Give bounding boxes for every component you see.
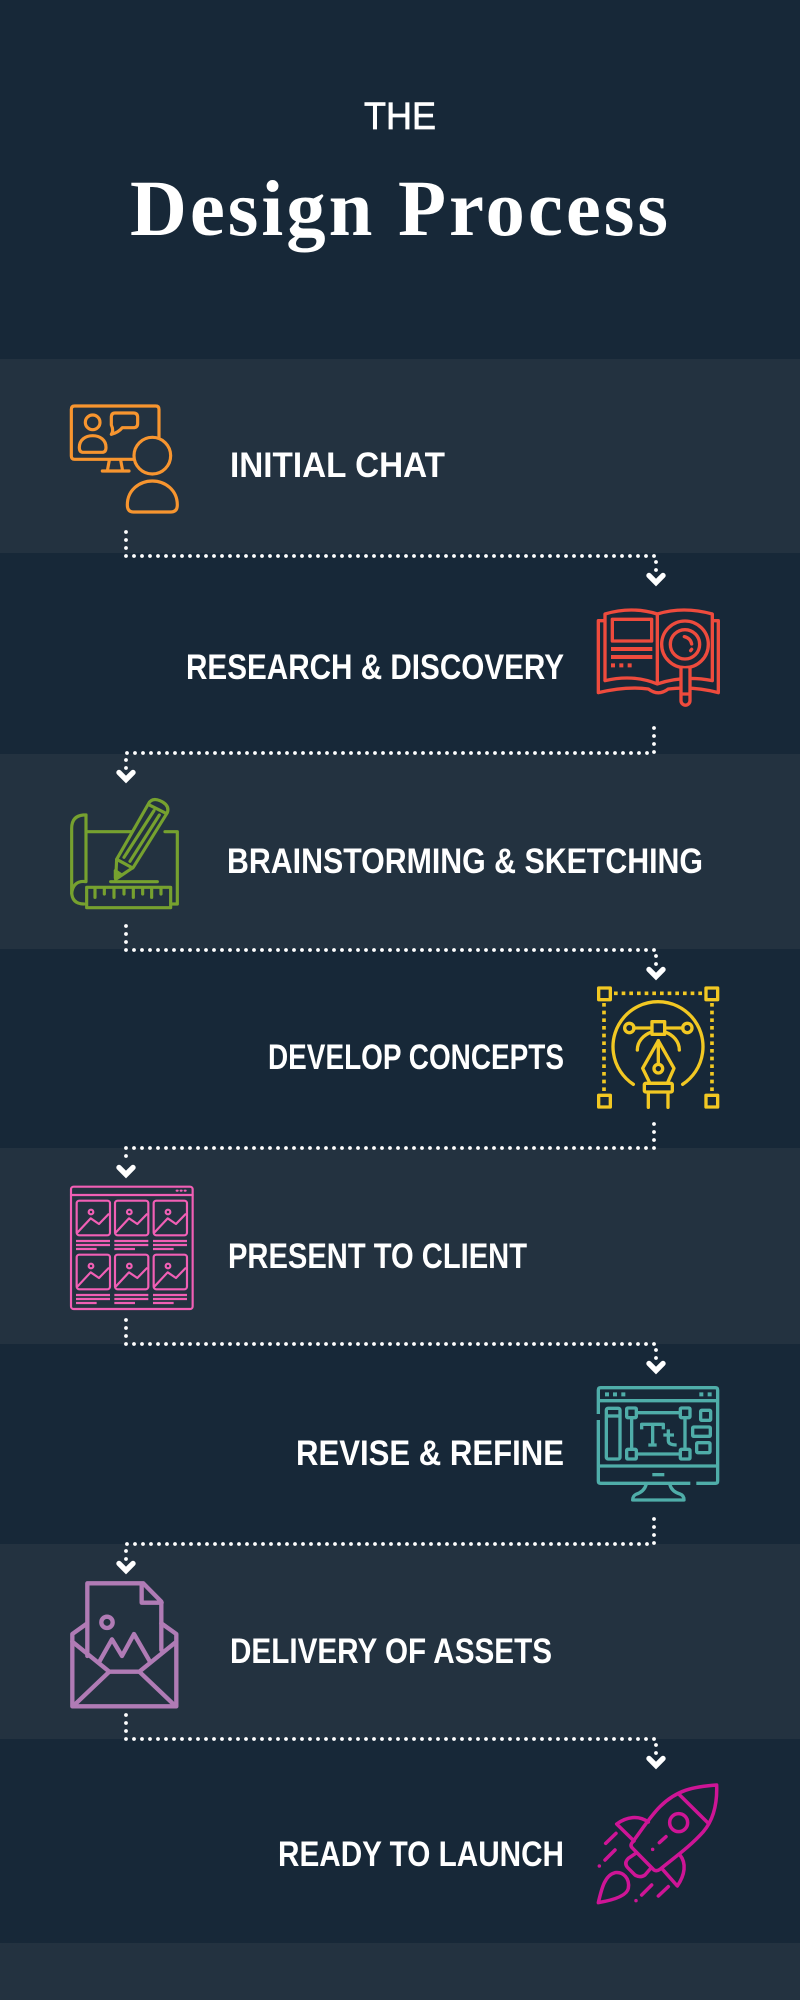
label: brainstorming and sketching: BRAINSTORMING & SKETCHING [227, 842, 703, 881]
connector: step 5 to step 6 [126, 1320, 663, 1370]
connector: step 3 to step 4 [126, 926, 663, 976]
connector: step 1 to step 2 [126, 532, 663, 582]
footer band [0, 1943, 800, 2000]
panel: step 7 delivery of assets [0, 1544, 800, 1739]
icon: type editor monitor [598, 1388, 718, 1500]
panel: step 3 brainstorming and sketching [0, 754, 800, 949]
connector: step 6 to step 7 [119, 1519, 654, 1570]
connector: step 2 to step 3 [119, 728, 654, 780]
icon: gallery window [71, 1187, 193, 1309]
label: develop concepts: DEVELOP CONCEPTS [268, 1038, 564, 1077]
icon: blueprint, pencil and ruler [72, 800, 177, 908]
icon: pen tool [599, 988, 718, 1107]
label: delivery of assets: DELIVERY OF ASSETS [230, 1632, 552, 1671]
label: present to client: PRESENT TO CLIENT [228, 1237, 527, 1276]
panel: step 5 present to client [0, 1148, 800, 1344]
panel: step 6 revise and refine [296, 1388, 718, 1500]
label: revise and refine: REVISE & REFINE [296, 1434, 564, 1473]
icon: rocket [598, 1785, 717, 1903]
label: initial chat: INITIAL CHAT [230, 446, 445, 485]
title block [130, 96, 671, 253]
panel: step 4 develop concepts [268, 988, 718, 1107]
label: ready to launch: READY TO LAUNCH [278, 1835, 564, 1874]
connector: step 7 to step 8 [126, 1715, 663, 1766]
heading: THE: THE [364, 96, 436, 138]
icon: open book with magnifier [598, 610, 718, 705]
panel: step 8 ready to launch [278, 1785, 717, 1903]
panel: step 1 initial chat [0, 359, 800, 553]
panel: step 2 research and discovery [186, 610, 718, 705]
icon: envelope with image [72, 1583, 176, 1706]
icon: video chat [71, 406, 177, 512]
heading: Design Process: Design Process [130, 166, 671, 253]
label: research and discovery: RESEARCH & DISCOVERY [186, 648, 564, 687]
connector: step 4 to step 5 [119, 1124, 654, 1174]
